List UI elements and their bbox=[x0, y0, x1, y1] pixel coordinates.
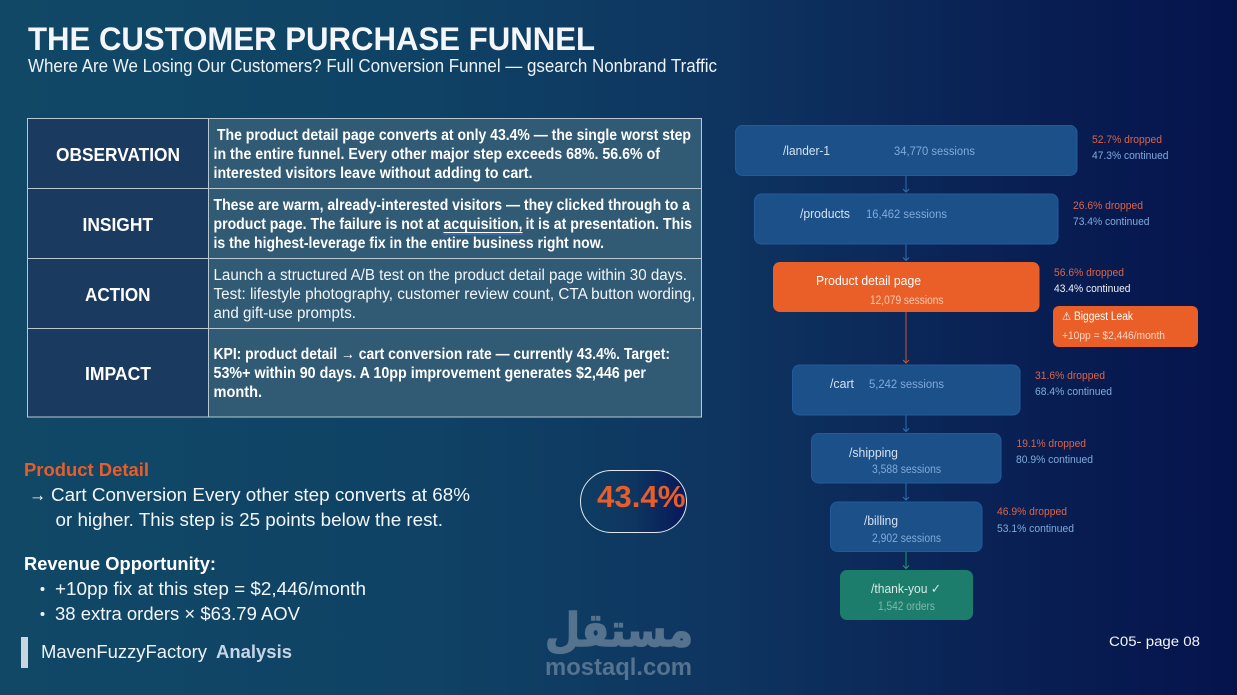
text block: product detail callout bbox=[24, 459, 470, 530]
step: shipping: 3,588 sessions bbox=[872, 464, 941, 476]
row: action: and gift-use prompts. bbox=[214, 305, 356, 322]
step: cart: /cart bbox=[830, 376, 854, 391]
row: observation: The product detail page converts at only 43.4% — the single worst step bbox=[217, 127, 691, 144]
watermark: mostaql: mostaql.com bbox=[545, 654, 692, 681]
step: products: 73.4% continued bbox=[1073, 216, 1150, 228]
step: lander: 47.3% continued bbox=[1092, 150, 1168, 162]
title: THE CUSTOMER PURCHASE FUNNEL bbox=[28, 21, 595, 57]
row: insight: INSIGHT bbox=[82, 215, 153, 235]
arrow: products to product detail bbox=[903, 244, 909, 260]
step: shipping: /shipping bbox=[849, 445, 898, 460]
row: insight bbox=[82, 197, 692, 252]
footer brand bbox=[21, 637, 292, 668]
callout: biggest leak bbox=[1053, 306, 1198, 347]
row: impact: month. bbox=[214, 384, 262, 401]
page number: C05- page 08 bbox=[1109, 634, 1200, 649]
row: insight: acquisition, bbox=[444, 216, 522, 233]
step: lander: 34,770 sessions bbox=[894, 146, 975, 158]
step: lander: 52.7% dropped bbox=[1092, 134, 1162, 146]
row: observation bbox=[56, 127, 691, 182]
step: cart: 68.4% continued bbox=[1035, 386, 1112, 398]
step: shipping: 19.1% dropped bbox=[1016, 438, 1086, 450]
row: impact: KPI: product detail → cart conversion rate — currently 43.4%. Target: bbox=[214, 346, 670, 363]
stat pill: 43.4% bbox=[580, 470, 686, 532]
row: observation: OBSERVATION bbox=[56, 145, 180, 165]
funnel chart bbox=[736, 126, 1198, 620]
step: thank-you: /thank-you ✓ bbox=[871, 581, 941, 596]
row: impact: 53%+ within 90 days. A 10pp improvement generates $2,446 per bbox=[214, 365, 646, 382]
text block: revenue opportunity: Revenue Opportunity: bbox=[24, 553, 216, 574]
arrow: shipping to billing bbox=[903, 483, 909, 500]
step: products: /products bbox=[800, 206, 850, 221]
step: cart: 31.6% dropped bbox=[1035, 370, 1105, 382]
arrow: cart to shipping bbox=[903, 415, 909, 432]
panel: analysis table bbox=[28, 118, 702, 417]
text block: revenue opportunity: +10pp fix at this step = $2,446/month bbox=[55, 578, 366, 599]
step: cart: 5,242 sessions bbox=[869, 379, 944, 391]
row: insight: is the highest-leverage fix in the entire business right now. bbox=[214, 235, 604, 252]
row: impact: IMPACT bbox=[85, 364, 151, 384]
row: action: ACTION bbox=[85, 285, 150, 305]
step: lander bbox=[736, 126, 1168, 176]
step: shipping bbox=[812, 434, 1093, 483]
step: product detail page: 56.6% dropped bbox=[1054, 267, 1124, 279]
footer brand: Analysis bbox=[216, 641, 292, 662]
row: impact bbox=[85, 346, 670, 401]
row: insight: These are warm, already-interested visitors — they clicked through to a bbox=[214, 197, 690, 214]
step: product detail page bbox=[773, 262, 1130, 312]
row: action: Test: lifestyle photography, customer review count, CTA button wording, bbox=[214, 286, 696, 303]
step: billing bbox=[830, 502, 1074, 552]
step: products: 26.6% dropped bbox=[1073, 200, 1143, 212]
step: lander: /lander-1 bbox=[783, 143, 830, 158]
step: products bbox=[754, 194, 1150, 244]
step: product detail page: Product detail page bbox=[816, 273, 921, 288]
text block: product detail callout: Cart Conversion Every other step converts at 68% bbox=[51, 484, 470, 505]
step: shipping: 80.9% continued bbox=[1016, 454, 1093, 466]
step: products: 16,462 sessions bbox=[866, 209, 947, 221]
text block: revenue opportunity: 38 extra orders × $63.79 AOV bbox=[55, 603, 301, 624]
step: billing: 53.1% continued bbox=[997, 523, 1074, 535]
arrow: lander to products bbox=[903, 176, 909, 192]
row: action bbox=[85, 267, 696, 322]
text block: product detail callout: → bbox=[29, 484, 46, 505]
row: insight: it is at presentation. This bbox=[526, 216, 692, 233]
text block: revenue opportunity bbox=[24, 553, 366, 624]
callout: biggest leak: ⚠ Biggest Leak bbox=[1062, 311, 1133, 323]
text block: product detail callout: or higher. This step is 25 points below the rest. bbox=[56, 509, 443, 530]
footer brand: MavenFuzzyFactory bbox=[41, 641, 208, 662]
arrow: product detail to cart bbox=[903, 312, 909, 363]
step: billing: 2,902 sessions bbox=[872, 533, 941, 545]
stat pill: 43.4%: 43.4% bbox=[597, 479, 686, 514]
step: product detail page: 12,079 sessions bbox=[870, 295, 944, 307]
step: thank-you: 1,542 orders bbox=[878, 601, 935, 613]
text block: product detail callout: Product Detail bbox=[24, 459, 149, 480]
watermark: mostaql: مستقل bbox=[545, 603, 693, 657]
step: billing: 46.9% dropped bbox=[997, 506, 1067, 518]
step: billing: /billing bbox=[864, 513, 898, 528]
callout: biggest leak: +10pp = $2,446/month bbox=[1062, 330, 1165, 342]
step: product detail page: 43.4% continued bbox=[1054, 283, 1130, 295]
watermark: mostaql bbox=[545, 603, 693, 681]
row: action: Launch a structured A/B test on the product detail page within 30 days. bbox=[214, 267, 687, 284]
step: cart bbox=[792, 365, 1112, 415]
step: thank-you bbox=[840, 570, 973, 620]
row: insight: product page. The failure is not at bbox=[214, 216, 440, 233]
arrow: billing to thank-you bbox=[903, 551, 909, 568]
row: observation: in the entire funnel. Every other major step exceeds 68%. 56.6% of bbox=[214, 146, 661, 163]
subtitle: Where Are We Losing Our Customers? Full Conversion Funnel — gsearch Nonbrand Traffic bbox=[28, 56, 717, 76]
row: observation: interested visitors leave without adding to cart. bbox=[214, 165, 532, 182]
